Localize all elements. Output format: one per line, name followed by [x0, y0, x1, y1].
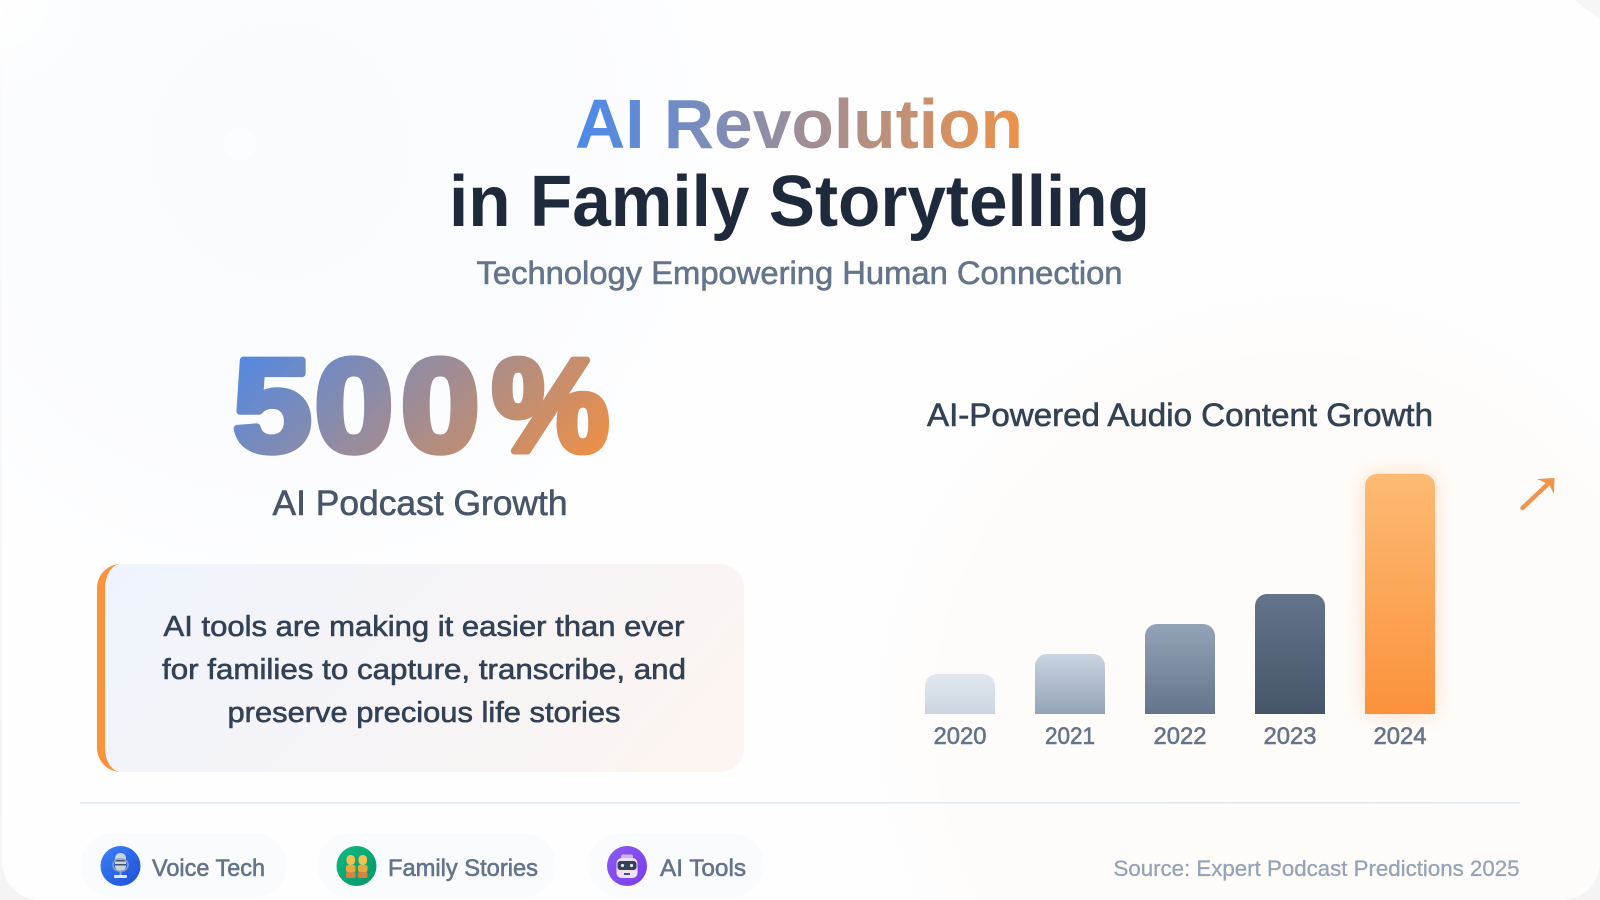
tag: Family Stories	[317, 833, 556, 897]
callout text: AI tools are making it easier than ever	[164, 611, 685, 643]
big stat: 500%: %	[492, 332, 609, 479]
source note: Source: Expert Podcast Predictions 2025	[1114, 856, 1520, 881]
title line: in Family Storytelling: in Family Storytelling	[449, 162, 1150, 242]
chart title: AI-Powered Audio Content Growth	[927, 397, 1433, 433]
title	[449, 85, 1150, 242]
bar chart	[925, 474, 1435, 750]
tag: Voice Tech	[80, 833, 287, 897]
subtitle: Technology Empowering Human Connection	[476, 255, 1122, 291]
bar: 2023	[1255, 594, 1325, 750]
tag label: Family Stories	[388, 855, 538, 882]
bar: 2020: 2020	[934, 723, 986, 750]
bar: 2021	[1035, 654, 1105, 750]
arrow: growth trend	[1522, 478, 1554, 508]
stat label: AI Podcast Growth	[272, 484, 568, 523]
bar: 2022: 2022	[1154, 723, 1206, 750]
title line: AI Revolution: AI Revolution	[575, 85, 1023, 163]
big stat: 500%	[233, 332, 609, 479]
icon: robot	[607, 846, 647, 886]
icon: family	[336, 846, 376, 886]
callout text	[162, 611, 686, 729]
bar: 2024	[1365, 474, 1435, 750]
icon: microphone	[100, 846, 140, 886]
tag label: AI Tools	[660, 855, 746, 882]
big stat: 500%: 5	[233, 332, 312, 479]
bar: 2020	[925, 674, 995, 750]
panel: callout	[97, 564, 744, 772]
big stat: 500%: 0	[315, 332, 393, 479]
bar: 2021: 2021	[1045, 723, 1095, 750]
callout text: preserve precious life stories	[228, 697, 620, 729]
bar: 2022	[1145, 624, 1215, 750]
big stat: 500%: 0	[401, 332, 480, 479]
bar: 2023: 2023	[1264, 723, 1316, 750]
bar: 2024: 2024	[1374, 723, 1426, 750]
tag label: Voice Tech	[152, 855, 265, 882]
tag: AI Tools	[588, 833, 764, 897]
callout text: for families to capture, transcribe, and	[162, 654, 686, 686]
